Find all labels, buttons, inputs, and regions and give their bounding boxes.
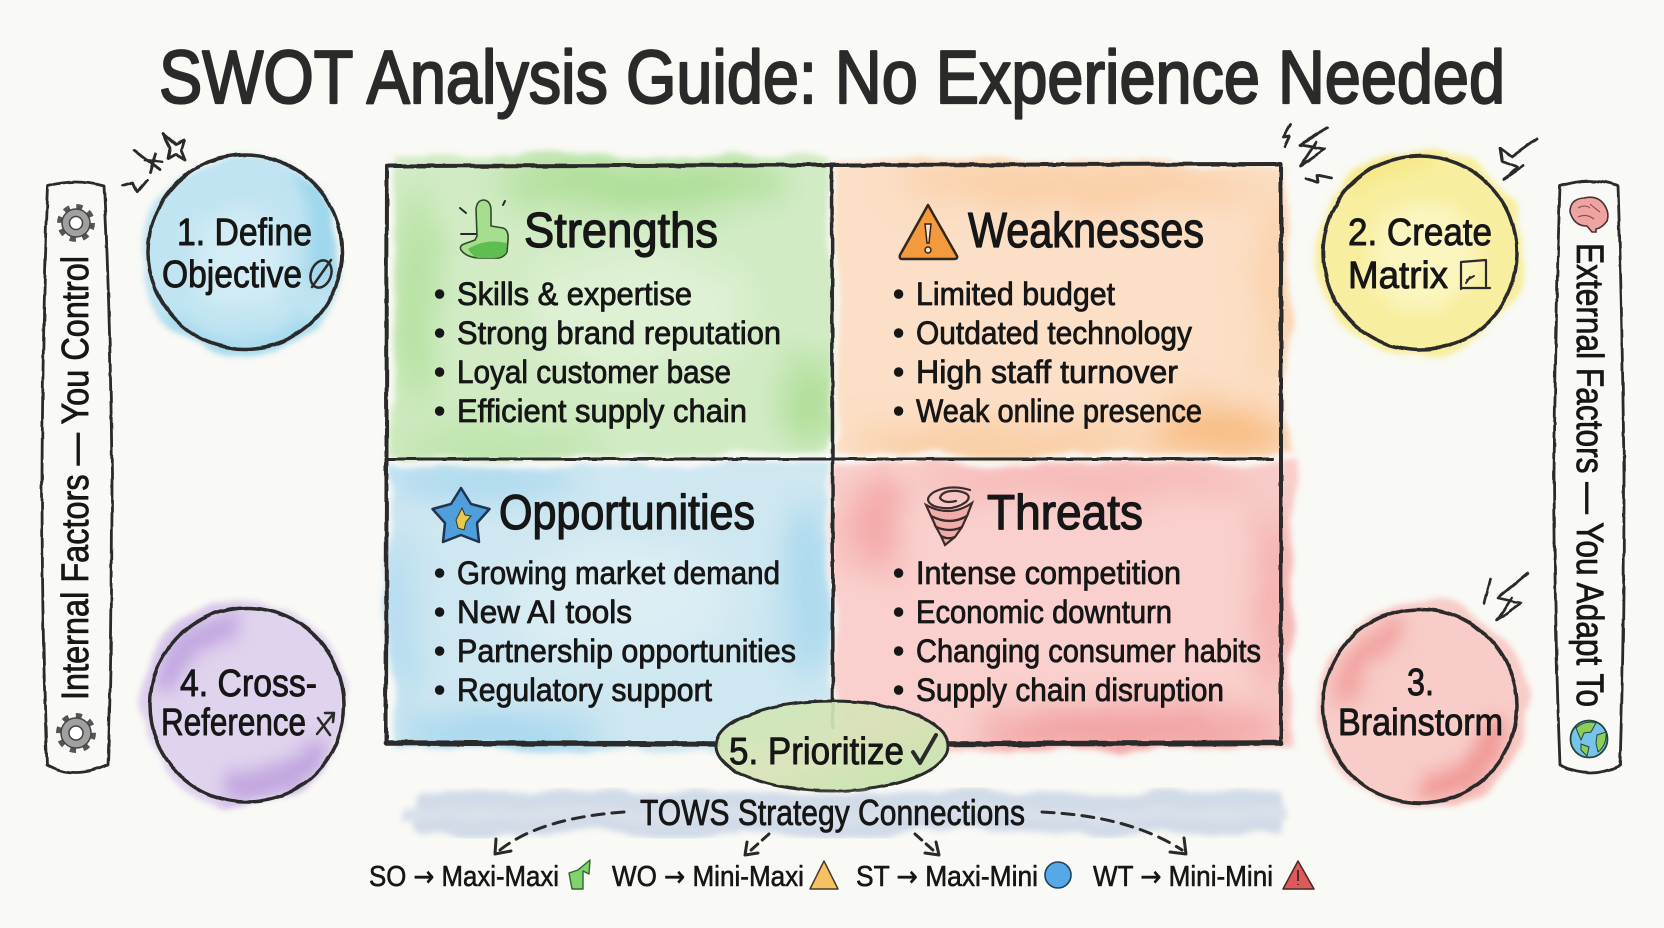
side label: Internal Factors — You Control (55, 256, 97, 700)
list: strengths: • (434, 354, 445, 390)
heading: Threats: Threats (987, 486, 1143, 540)
icon: star (432, 488, 490, 542)
list: weaknesses: Outdated technology (916, 315, 1192, 351)
circle outline (150, 608, 344, 802)
opportunities watercolor wash (380, 460, 834, 753)
step 1: define objective: Objective (162, 254, 302, 296)
circle outline (148, 155, 342, 349)
heading: Weaknesses: Weaknesses (968, 204, 1204, 258)
circle outline (1323, 609, 1517, 803)
icon: warning triangle (900, 205, 957, 259)
circle wash (1317, 151, 1523, 357)
step label: 1. Define (177, 212, 312, 254)
SO strategy: SO → Maxi-Maxi (369, 860, 559, 893)
panel: threats (836, 463, 1293, 750)
icon: cross arrows (317, 713, 334, 735)
step label: 2. Create (1348, 212, 1492, 254)
step 1: define objective (142, 154, 344, 356)
circle wash (141, 601, 347, 807)
TOWS strategy row (369, 860, 1314, 893)
icon: target slash (307, 257, 335, 291)
icon: red warning (1283, 861, 1314, 889)
list: weaknesses: • (893, 393, 904, 429)
list: strengths (434, 276, 781, 429)
icon: tornado (926, 487, 972, 545)
TOWS dashed arrows (495, 812, 1186, 855)
list: opportunities: Growing market demand (457, 555, 780, 591)
list: threats: Economic downturn (916, 594, 1172, 630)
icon: globe (1570, 720, 1608, 758)
list: strengths: • (434, 276, 445, 312)
lightning: step 3 (1484, 573, 1528, 620)
list: weaknesses: Limited budget (916, 276, 1115, 312)
sparkles: step 1 (123, 133, 185, 192)
weaknesses watercolor wash (836, 160, 1291, 461)
list: opportunities (434, 555, 796, 708)
step 3: brainstorm (1320, 602, 1528, 810)
icon: orange triangle (810, 861, 838, 889)
list: opportunities: • (434, 672, 445, 708)
icon: matrix note (1461, 260, 1490, 289)
arrow to SO (495, 812, 624, 854)
heading: Opportunities: Opportunities (499, 486, 755, 540)
left pill: internal factors (42, 182, 112, 772)
list: threats: • (893, 672, 904, 708)
list: threats: Changing consumer habits (916, 633, 1261, 669)
list: weaknesses: Weak online presence (916, 393, 1202, 429)
circle outline (1323, 156, 1517, 350)
arrow to WT (1042, 812, 1186, 854)
step 2: create matrix (1317, 151, 1523, 357)
step 5: prioritize (716, 701, 948, 791)
WO strategy: WO → Mini-Maxi (612, 860, 804, 893)
step 3: brainstorm: Brainstorm (1338, 702, 1503, 744)
threats watercolor wash (836, 463, 1293, 750)
list: weaknesses: • (893, 276, 904, 312)
panel: weaknesses (836, 160, 1291, 461)
list: weaknesses: • (893, 354, 904, 390)
pill outline (1554, 181, 1624, 772)
step 2: create matrix: Matrix (1348, 255, 1448, 297)
panel: strengths (390, 156, 840, 461)
list: threats: Supply chain disruption (916, 672, 1224, 708)
icon: thumbs up (460, 200, 508, 258)
list: opportunities: Partnership opportunities (457, 633, 796, 669)
icon: blue globe (1045, 862, 1071, 888)
icon: gear bottom (59, 716, 93, 750)
list: strengths: • (434, 315, 445, 351)
matrix frame (386, 164, 1281, 744)
heading: Strengths: Strengths (524, 204, 718, 258)
pill outline (42, 182, 112, 772)
panel: opportunities (380, 460, 834, 753)
arrow to ST (915, 834, 939, 855)
list: threats: • (893, 594, 904, 630)
side label: External Factors — You Adapt To (1568, 243, 1610, 707)
circle wash (142, 154, 344, 356)
list: opportunities: Regulatory support (457, 672, 712, 708)
lightning: step 2 (1284, 125, 1537, 182)
prioritize ellipse (716, 701, 948, 791)
arrow to WO (745, 834, 769, 855)
step 4: cross-reference: Reference (161, 702, 306, 744)
strengths watercolor wash (390, 156, 840, 461)
list: threats: Intense competition (916, 555, 1181, 591)
ST strategy: ST → Maxi-Mini (856, 860, 1038, 893)
right pill: external factors (1554, 181, 1624, 772)
WT strategy: WT → Mini-Mini (1093, 860, 1273, 893)
list: threats: • (893, 555, 904, 591)
list: strengths: Skills & expertise (457, 276, 692, 312)
icon: brain (1570, 197, 1608, 232)
list: threats: • (893, 633, 904, 669)
step label: 3. (1407, 662, 1434, 704)
list: opportunities: • (434, 594, 445, 630)
circle wash (1320, 602, 1528, 810)
TOWS heading: TOWS Strategy Connections (640, 792, 1025, 833)
list: strengths: Efficient supply chain (457, 393, 747, 429)
step 4: cross-reference (141, 601, 347, 807)
list: weaknesses: High staff turnover (916, 354, 1178, 390)
list: opportunities: New AI tools (457, 594, 632, 630)
icon: gear top (60, 207, 92, 239)
prioritize label: 5. Prioritize (729, 731, 904, 773)
list: weaknesses: • (893, 315, 904, 351)
list: opportunities: • (434, 555, 445, 591)
icon: green arrow (569, 860, 590, 889)
step label: 4. Cross- (180, 663, 317, 705)
list: strengths: • (434, 393, 445, 429)
icon: check mark (913, 735, 936, 763)
list: strengths: Strong brand reputation (457, 315, 781, 351)
list: opportunities: • (434, 633, 445, 669)
list: threats (893, 555, 1261, 708)
TOWS brush banner (405, 792, 1285, 834)
list: weaknesses (893, 276, 1202, 429)
list: strengths: Loyal customer base (457, 354, 731, 390)
